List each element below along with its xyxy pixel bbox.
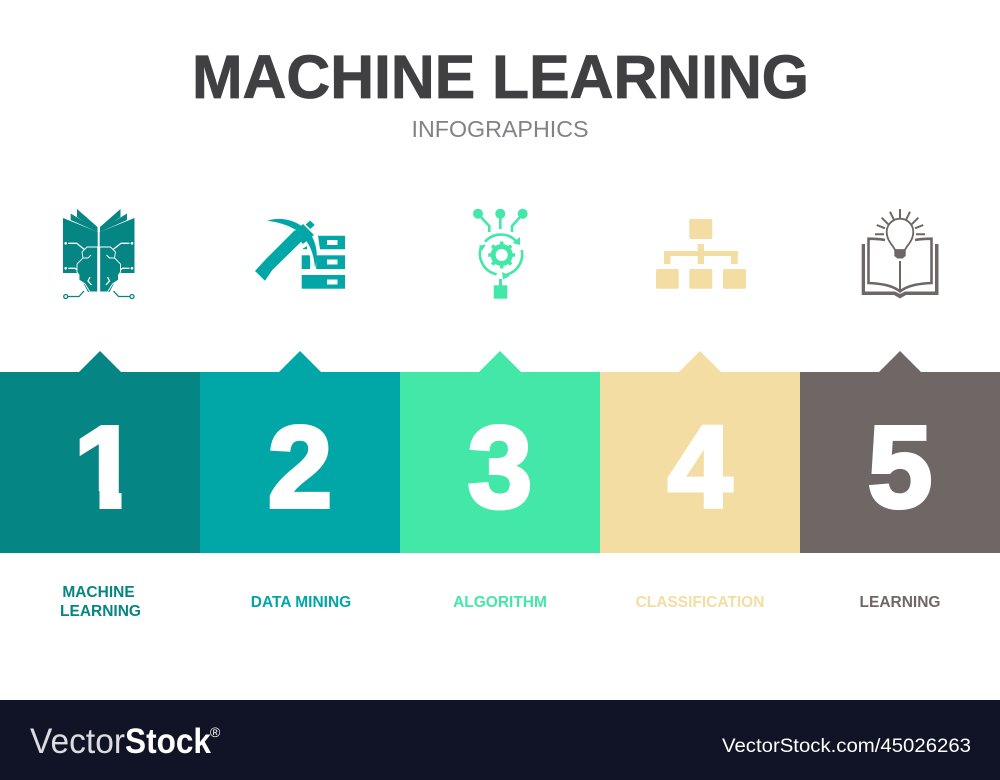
icon: open book with light bulb	[862, 209, 938, 298]
footer logo: ®	[210, 724, 221, 740]
number 4: 4	[668, 402, 732, 532]
footer bar	[0, 700, 1000, 780]
label: algorithm: ALGORITHM	[453, 594, 547, 611]
label: machine learning: LEARNING	[60, 603, 141, 620]
footer logo: Stock	[125, 722, 211, 761]
panel: step 3	[400, 351, 600, 553]
footer logo	[30, 722, 221, 761]
icon: hierarchy chart	[656, 219, 746, 289]
number 3: 3	[468, 402, 532, 532]
label: learning: LEARNING	[860, 594, 940, 611]
footer url: VectorStock.com/45026263	[722, 736, 971, 757]
panel: step 4	[600, 351, 800, 553]
icon: book with brain and circuits	[63, 209, 134, 298]
panel: step 5	[800, 351, 1000, 553]
title: MACHINE LEARNING	[192, 43, 809, 111]
label: machine learning: MACHINE	[62, 584, 135, 601]
number 1: 1	[74, 402, 138, 532]
number 2: 2	[268, 402, 332, 532]
label: data mining: DATA MINING	[251, 594, 351, 611]
footer logo: Vector	[30, 722, 125, 761]
icon: pickaxe and data server	[255, 219, 345, 289]
subtitle: INFOGRAPHICS	[412, 116, 588, 142]
icon: algorithm gear with nodes	[473, 209, 528, 299]
icon: gear	[488, 242, 515, 268]
label: machine learning	[60, 584, 141, 620]
icon: brain	[77, 247, 120, 292]
label: classification: CLASSIFICATION	[636, 594, 764, 611]
panel: step 1	[0, 351, 200, 553]
number 5: 5	[868, 402, 932, 532]
panel: step 2	[200, 351, 400, 553]
